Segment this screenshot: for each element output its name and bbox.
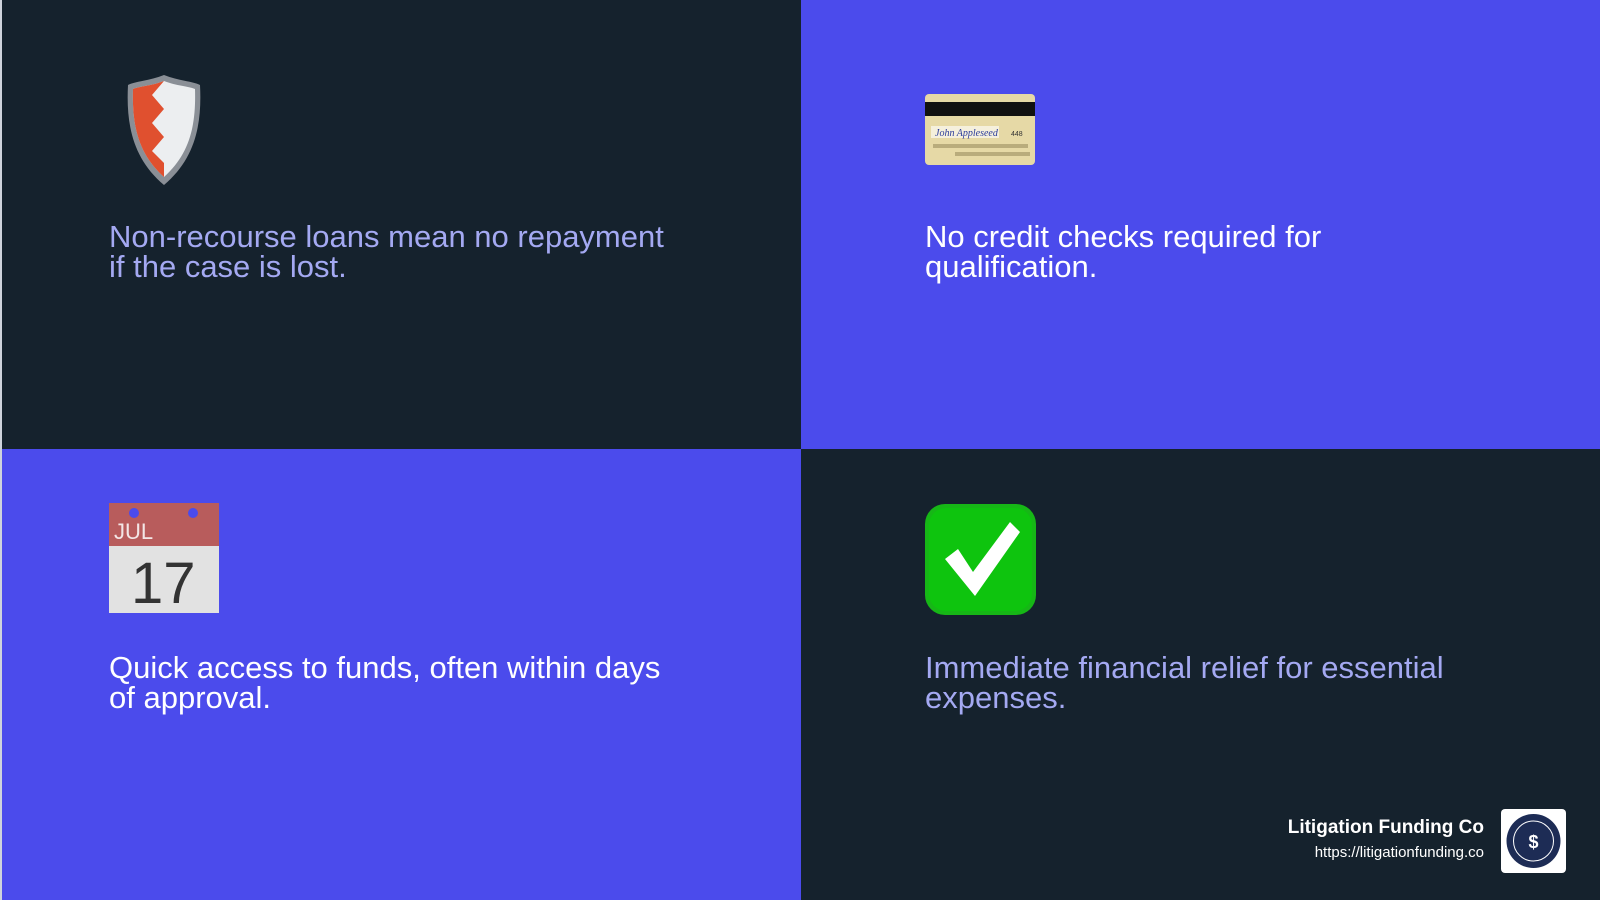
panel: non-recourse bbox=[2, 0, 801, 449]
text: non-recourse bbox=[109, 219, 664, 284]
text: financial relief bbox=[925, 650, 1444, 715]
text: no credit checks: No credit checks required for bbox=[925, 219, 1321, 254]
panel: financial relief bbox=[801, 449, 1600, 900]
logo bbox=[1501, 809, 1566, 873]
icon: calendar: JUL bbox=[114, 519, 153, 544]
text: no credit checks bbox=[925, 219, 1321, 284]
icon: check mark bbox=[925, 504, 1036, 615]
logo: $ bbox=[1528, 832, 1539, 852]
text: financial relief: expenses. bbox=[925, 680, 1066, 715]
icon: credit card: 448 bbox=[1011, 131, 1023, 138]
text: non-recourse: if the case is lost. bbox=[109, 249, 347, 284]
brand: company name and url: Litigation Funding Co bbox=[1288, 817, 1484, 838]
panel: quick access bbox=[2, 449, 801, 900]
text: non-recourse: Non-recourse loans mean no repayment bbox=[109, 219, 664, 254]
text: quick access: of approval. bbox=[109, 680, 271, 715]
panel: no credit checks bbox=[801, 0, 1600, 449]
icon: shield bbox=[128, 75, 200, 185]
text: quick access bbox=[109, 650, 660, 715]
text: quick access: Quick access to funds, often within days bbox=[109, 650, 660, 685]
brand: company name and url bbox=[1288, 817, 1484, 861]
icon: credit card: John Appleseed bbox=[935, 128, 999, 139]
icon: calendar bbox=[109, 503, 219, 613]
text: no credit checks: qualification. bbox=[925, 249, 1097, 284]
brand: company name and url: https://litigationfunding.co bbox=[1315, 844, 1484, 861]
icon: credit card bbox=[925, 94, 1035, 165]
text: financial relief: Immediate financial relief for essential bbox=[925, 650, 1444, 685]
